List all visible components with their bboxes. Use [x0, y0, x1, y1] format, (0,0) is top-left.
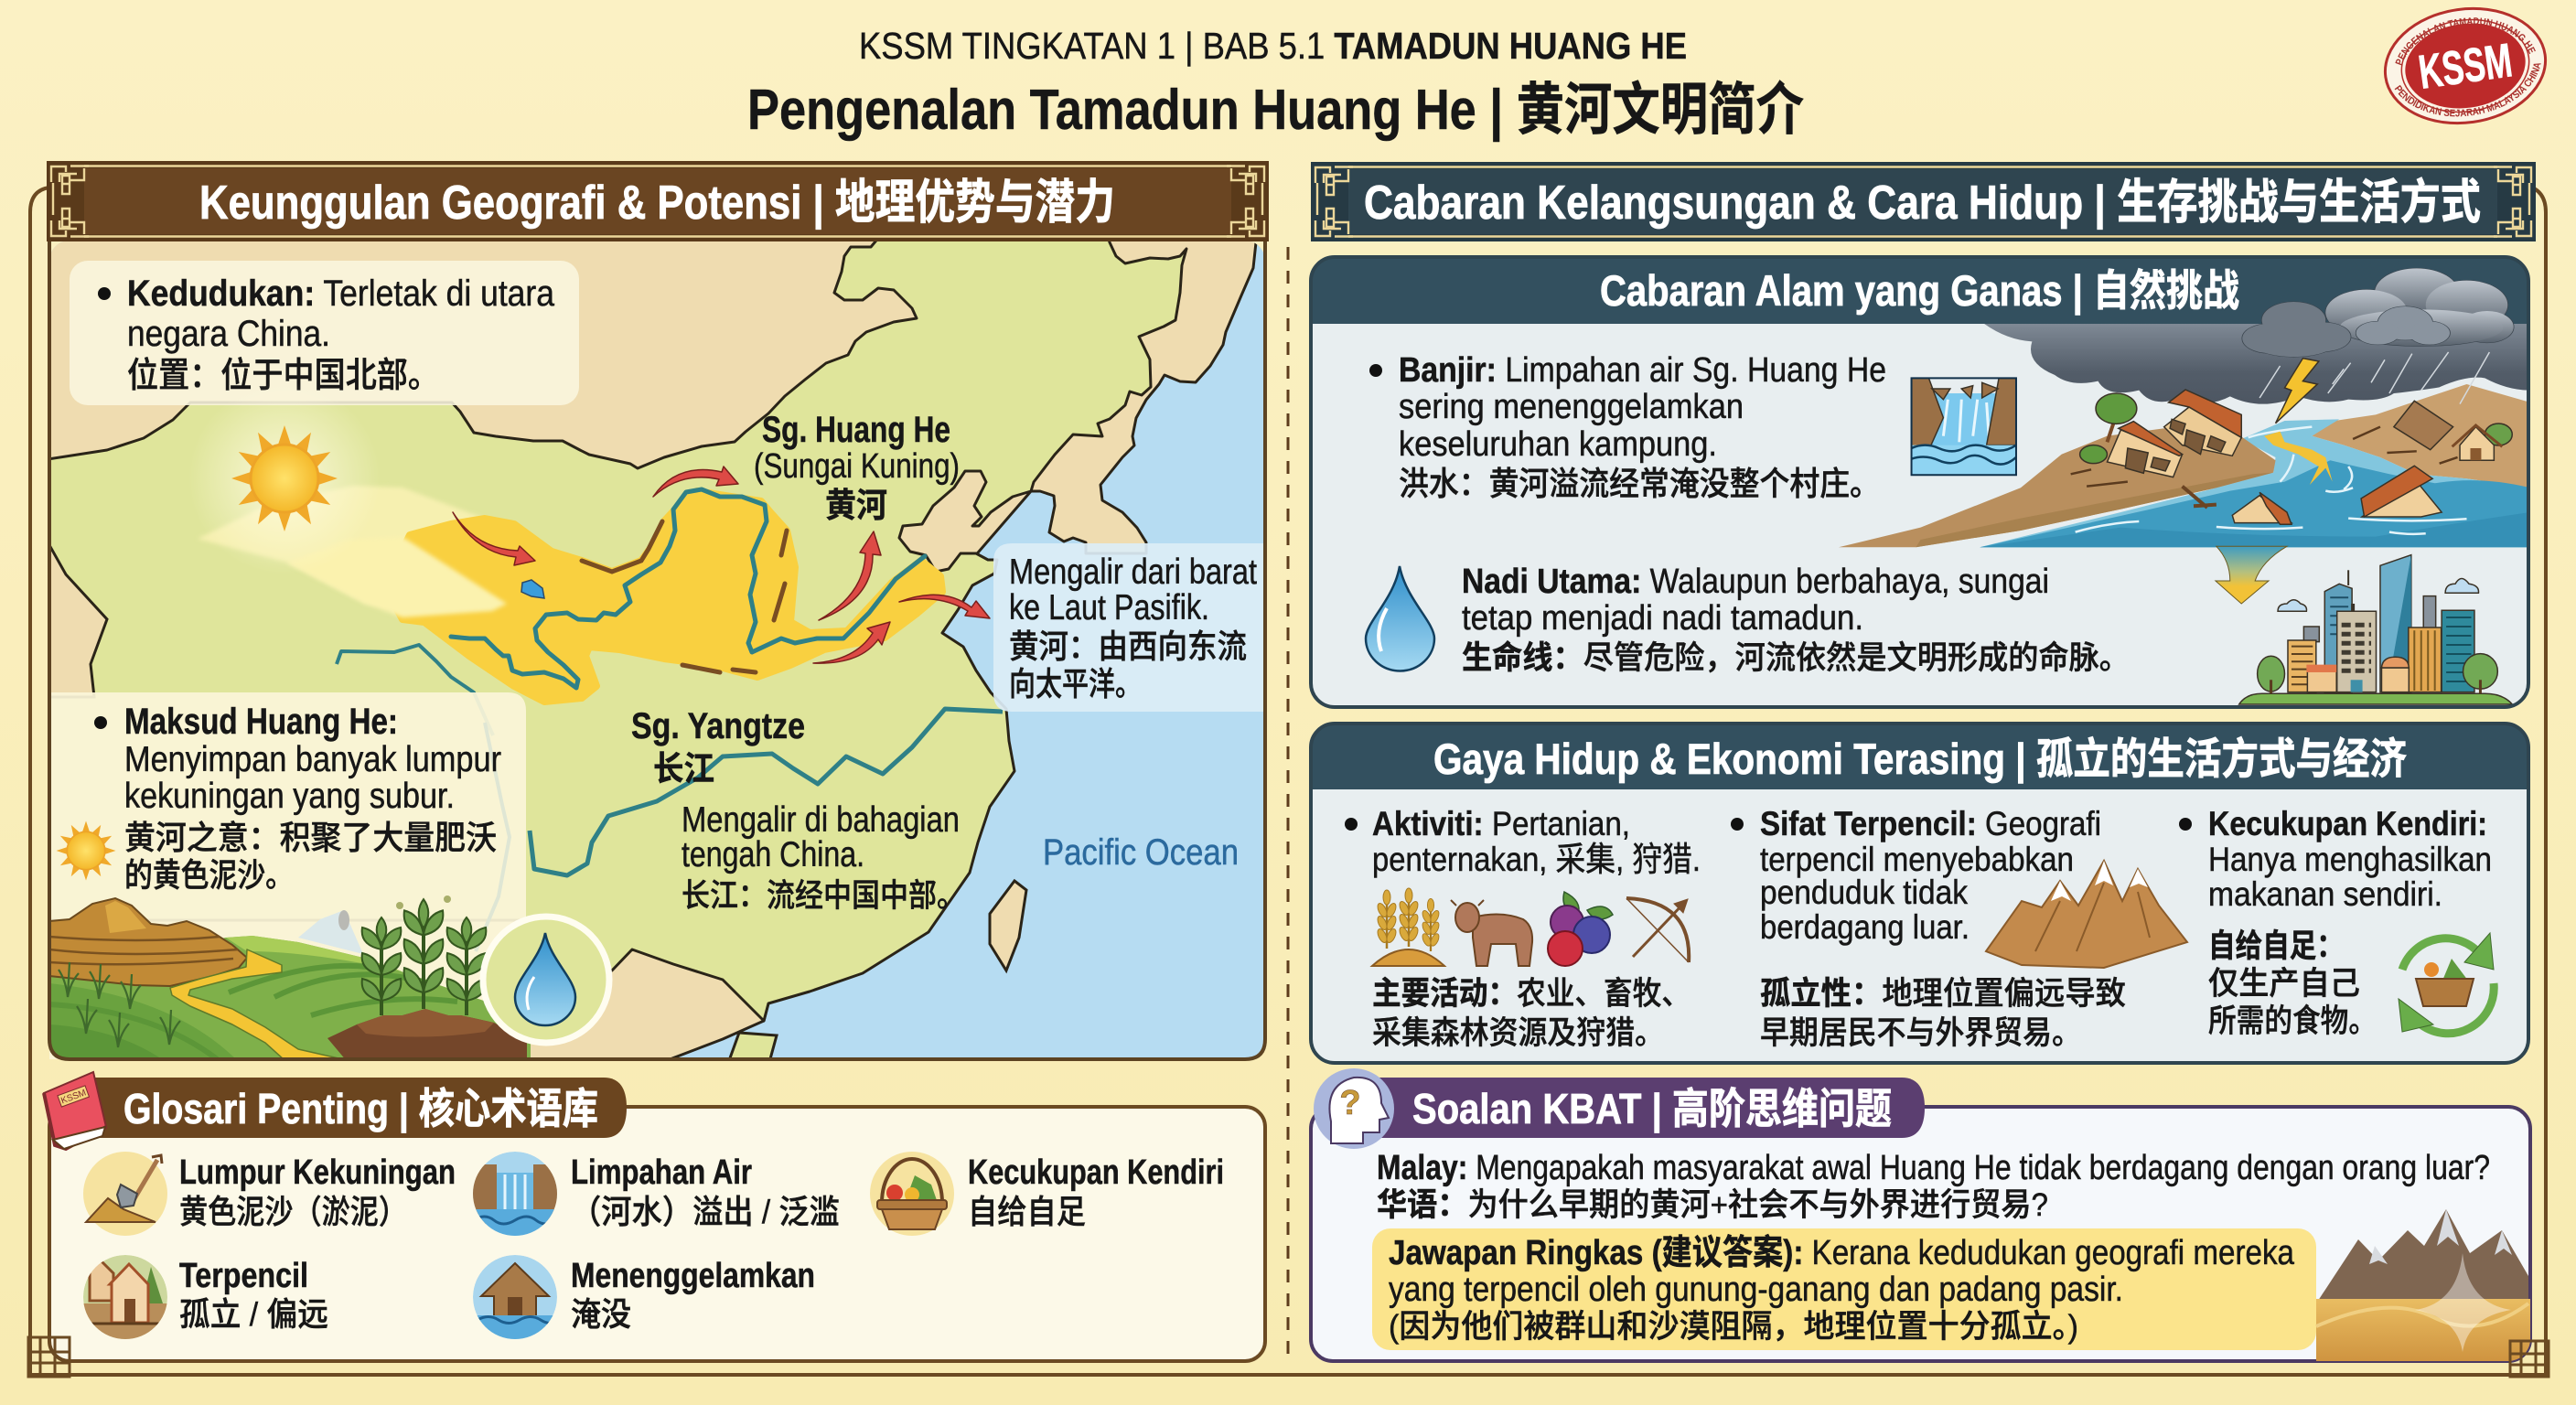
small house	[2485, 424, 2512, 445]
island: Taiwan	[990, 881, 1026, 971]
icon: food basket	[870, 1152, 954, 1236]
info box: Maksud Huang He: kekuningan yang subur.	[124, 777, 455, 816]
label: Sg. Huang He: Sg. Huang He	[762, 410, 950, 450]
heading text: Gaya Hidup & Ekonomi Terasing | 孤立的生活方式与经济	[1433, 735, 2407, 783]
column: Sifat Terpencil: Sifat Terpencil: Geografi	[1760, 805, 2101, 842]
term: Lumpur Kekuningan: Lumpur Kekuningan	[179, 1153, 456, 1192]
icon: remote houses	[83, 1255, 167, 1340]
column: Aktiviti: 主要活动：农业、畜牧、	[1372, 976, 1690, 1012]
callout: answer: yang terpencil oleh gunung-ganang dan padang pasir.	[1389, 1271, 2123, 1309]
callout: answer: (因为他们被群山和沙漠阻隔，地理位置十分孤立。)	[1389, 1309, 2078, 1345]
title line: course: KSSM TINGKATAN 1 | BAB 5.1 TAMADUN HUANG HE	[859, 25, 1687, 67]
text: question	[1377, 1149, 2490, 1223]
river deep	[1980, 460, 2530, 547]
info box: river flow: Mengalir dari barat	[1009, 552, 1257, 592]
info box: Maksud Huang He: 黄河之意：积聚了大量肥沃	[124, 819, 497, 856]
text: Nadi Utama: 生命线：尽管危险，河流依然是文明形成的命脉。	[1462, 640, 2130, 676]
green fields	[49, 936, 531, 1061]
icon: mountains	[1986, 861, 2187, 968]
term: Menenggelamkan: Menenggelamkan	[571, 1257, 815, 1295]
panel: glossary	[44, 1072, 1265, 1361]
KBAT heading pill: Soalan KBAT | 高阶思维问题	[1412, 1085, 1892, 1132]
icon: sun	[188, 382, 381, 574]
wrecked house	[2394, 401, 2453, 450]
ornament: bottom-right corner	[2510, 1341, 2549, 1377]
panel: natural challenges	[1311, 257, 2530, 707]
info box: Maksud Huang He: 的黄色泥沙。	[124, 856, 294, 894]
rain	[2259, 352, 2489, 404]
term: Limpahan Air: （河水）溢出 / 泛滥	[571, 1193, 840, 1230]
cracks	[2071, 427, 2458, 487]
front house	[2107, 430, 2183, 477]
term: Kecukupan Kendiri: Kecukupan Kendiri	[968, 1153, 1224, 1192]
info box: river flow: 向太平洋。	[1009, 665, 1142, 702]
label: Sg. Yangtze: 长江	[653, 750, 714, 788]
term: Terpencil: 孤立 / 偏远	[179, 1295, 328, 1333]
map	[42, 236, 1265, 1066]
cliffs	[582, 521, 787, 672]
term: Limpahan Air	[473, 1152, 840, 1237]
term: Kecukupan Kendiri	[870, 1152, 1224, 1236]
distant peak	[298, 910, 363, 954]
illustration: farmland	[49, 896, 531, 1061]
illustration: storm and flood	[1839, 268, 2530, 547]
icon: cow	[1451, 900, 1532, 966]
info box: river flow	[993, 543, 1265, 712]
glossary heading pill	[94, 1078, 627, 1138]
icon: berries	[1548, 892, 1613, 966]
term: Menenggelamkan	[473, 1255, 815, 1341]
column: Kecukupan Kendiri	[2179, 805, 2494, 1039]
icon: water drop in circle	[483, 917, 609, 1043]
China land	[42, 236, 1186, 1021]
lake	[521, 580, 544, 598]
illustration: city	[2239, 555, 2512, 704]
label: Sg. Yangtze	[631, 706, 805, 788]
term: Lumpur Kekuningan	[83, 1152, 456, 1236]
storm sky	[1984, 324, 2530, 404]
heading text: Cabaran Alam yang Ganas | 自然挑战	[1600, 266, 2239, 315]
column: Sifat Terpencil: 孤立性：地理位置偏远导致	[1760, 976, 2126, 1012]
info box: Kedudukan: Kedudukan: Terletak di utara	[127, 273, 555, 314]
text: Nadi Utama: tetap menjadi nadi tamadun.	[1462, 599, 1863, 638]
label: Sg. Huang He	[754, 410, 960, 524]
column: Sifat Terpencil: terpencil menyebabkan	[1760, 841, 2074, 878]
icon: head with question mark: ?	[1339, 1084, 1361, 1122]
clouds	[2325, 268, 2514, 346]
text: Nadi Utama	[1462, 563, 2130, 676]
back house	[2164, 407, 2241, 456]
river shallows	[1980, 419, 2530, 547]
western neighbour	[51, 545, 109, 699]
callout: answer	[1372, 1228, 2316, 1350]
column: Aktiviti: Aktiviti: Pertanian,	[1372, 805, 1630, 842]
icon: water drop	[1366, 566, 1434, 670]
map frame	[49, 241, 1265, 1059]
icon: submerged house	[473, 1255, 558, 1341]
column: Kecukupan Kendiri: makanan sendiri.	[2208, 875, 2442, 913]
label: Sg. Huang He: 黄河	[825, 487, 887, 524]
icon: bow and arrow	[1626, 898, 1689, 962]
info box: Kedudukan: 位置：位于中国北部。	[127, 357, 439, 395]
header: geography	[47, 161, 1269, 241]
text: Banjir	[1369, 351, 1886, 502]
header: survival	[1311, 162, 2536, 241]
icon: crop plants	[362, 899, 486, 1015]
label: Sg. Yangtze: Sg. Yangtze	[631, 706, 805, 746]
panel: KBAT question	[1311, 1068, 2530, 1361]
column: Sifat Terpencil: 早期居民不与外界贸易。	[1760, 1015, 2081, 1051]
term: Lumpur Kekuningan: 黄色泥沙（淤泥）	[179, 1193, 407, 1230]
title	[747, 25, 1804, 143]
icon: KSSM badge: PENDIDIKAN SEJARAH MALAYSIA CHINA	[2395, 63, 2541, 117]
illustration: mountains and desert	[2316, 1209, 2530, 1361]
column: Kecukupan Kendiri: 仅生产自己	[2208, 966, 2360, 1002]
broken dam	[1932, 393, 1996, 446]
lightning	[2276, 359, 2319, 424]
KBAT heading pill	[1379, 1078, 1925, 1138]
icon: overflowing dam	[473, 1152, 557, 1237]
river: Yangtze upper	[337, 645, 493, 735]
panel border	[1311, 257, 2528, 707]
ornament: bottom-left corner	[28, 1337, 70, 1377]
red arrows	[453, 467, 990, 663]
yellow silt swirl	[2264, 432, 2333, 485]
loess plateau pale	[200, 486, 479, 563]
distant hill	[2312, 384, 2530, 488]
column: Sifat Terpencil: penduduk tidak	[1760, 874, 1968, 911]
seedlings	[59, 962, 180, 1047]
info box: Kedudukan	[70, 261, 579, 405]
term: Menenggelamkan: 淹没	[571, 1295, 631, 1333]
glossary heading pill: Glosari Penting | 核心术语库	[123, 1085, 598, 1132]
left bank	[1839, 427, 2276, 547]
column: Kecukupan Kendiri: 自给自足：	[2208, 928, 2344, 964]
column: Kecukupan Kendiri: Hanya menghasilkan	[2208, 841, 2492, 878]
river: Huang He	[451, 489, 925, 688]
info box: Maksud Huang He: Menyimpan banyak lumpur	[124, 740, 501, 779]
column: Sifat Terpencil: berdagang luar.	[1760, 908, 1970, 946]
text: Nadi Utama: Nadi Utama: Walaupun berbahaya, sungai	[1462, 563, 2049, 601]
text: Banjir: sering menenggelamkan	[1399, 388, 1744, 426]
icon: KSSM badge	[2384, 7, 2547, 124]
loess plateau	[384, 491, 942, 702]
icon: wheat	[1372, 888, 1444, 966]
info box: Maksud Huang He	[49, 692, 526, 1059]
text: Yangtze description: tengah China.	[682, 835, 864, 874]
column: Sifat Terpencil	[1731, 805, 2187, 1051]
arrow: flood to city	[2216, 546, 2287, 604]
info box: Kedudukan: negara China.	[127, 314, 330, 354]
term: Terpencil	[83, 1255, 328, 1340]
tree	[2107, 418, 2115, 442]
term: Kecukupan Kendiri: 自给自足	[968, 1193, 1086, 1230]
callout: answer: Jawapan Ringkas (建议答案): Kerana kedudukan geografi mereka	[1389, 1234, 2295, 1272]
heading text: Keunggulan Geografi & Potensi | 地理优势与潜力	[199, 177, 1115, 230]
icon: KSSM badge: PENGENALAN TAMADUN HUANG HE	[2395, 17, 2536, 66]
info box: Maksud Huang He: Maksud Huang He:	[124, 702, 398, 742]
island: Hainan	[728, 1032, 778, 1057]
column: Kecukupan Kendiri: 所需的食物。	[2208, 1003, 2377, 1039]
term: Terpencil: Terpencil	[179, 1257, 308, 1295]
text: Banjir: keseluruhan kampung.	[1399, 425, 1717, 464]
soil mound	[327, 1009, 527, 1061]
icon: head with question mark	[1314, 1068, 1394, 1149]
term: Limpahan Air: Limpahan Air	[571, 1153, 752, 1192]
yellow river	[170, 949, 347, 1060]
column: Aktiviti: penternakan, 采集, 狩猎.	[1372, 841, 1701, 878]
text: Banjir: 洪水：黄河溢流经常淹没整个村庄。	[1399, 465, 1880, 502]
icon: book	[44, 1072, 106, 1149]
column: Kecukupan Kendiri: Kecukupan Kendiri:	[2208, 805, 2487, 842]
icon: KSSM badge: KSSM	[2416, 34, 2516, 100]
icon: self-sufficiency cycle	[2399, 933, 2494, 1034]
neighbouring land	[46, 236, 1256, 1066]
text: Yangtze description: Mengalir di bahagian	[682, 800, 960, 840]
river: Yangtze	[530, 709, 1003, 875]
text: Yangtze description	[682, 800, 965, 914]
icon: small sun	[57, 821, 115, 880]
title line: main: Pengenalan Tamadun Huang He | 黄河文明简介	[747, 79, 1804, 143]
loess plateau bright edge	[287, 537, 507, 617]
panel: lifestyle and economy	[1311, 724, 2528, 1063]
text: question: 华语：为什么早期的黄河+社会不与外界进行贸易?	[1377, 1187, 2048, 1223]
column: Aktiviti	[1345, 805, 1701, 1051]
label: Sg. Huang He: (Sungai Kuning)	[754, 447, 960, 486]
icon: book: KSSM	[59, 1088, 88, 1106]
info box: river flow: ke Laut Pasifik.	[1009, 588, 1209, 627]
panel: geography map	[42, 236, 1265, 1066]
soil hill	[49, 898, 247, 986]
water streaks	[2076, 427, 2466, 534]
column: Aktiviti: 采集森林资源及狩猎。	[1372, 1015, 1664, 1051]
text: Yangtze description: 长江：流经中国中部。	[682, 878, 965, 914]
info box: river flow: 黄河：由西向东流	[1009, 627, 1247, 665]
label: Pacific Ocean: Pacific Ocean	[1043, 832, 1239, 873]
text: Banjir: Banjir: Limpahan air Sg. Huang He	[1399, 351, 1886, 390]
submerged houses	[2232, 496, 2292, 523]
icon: shovel in mud	[83, 1152, 167, 1236]
